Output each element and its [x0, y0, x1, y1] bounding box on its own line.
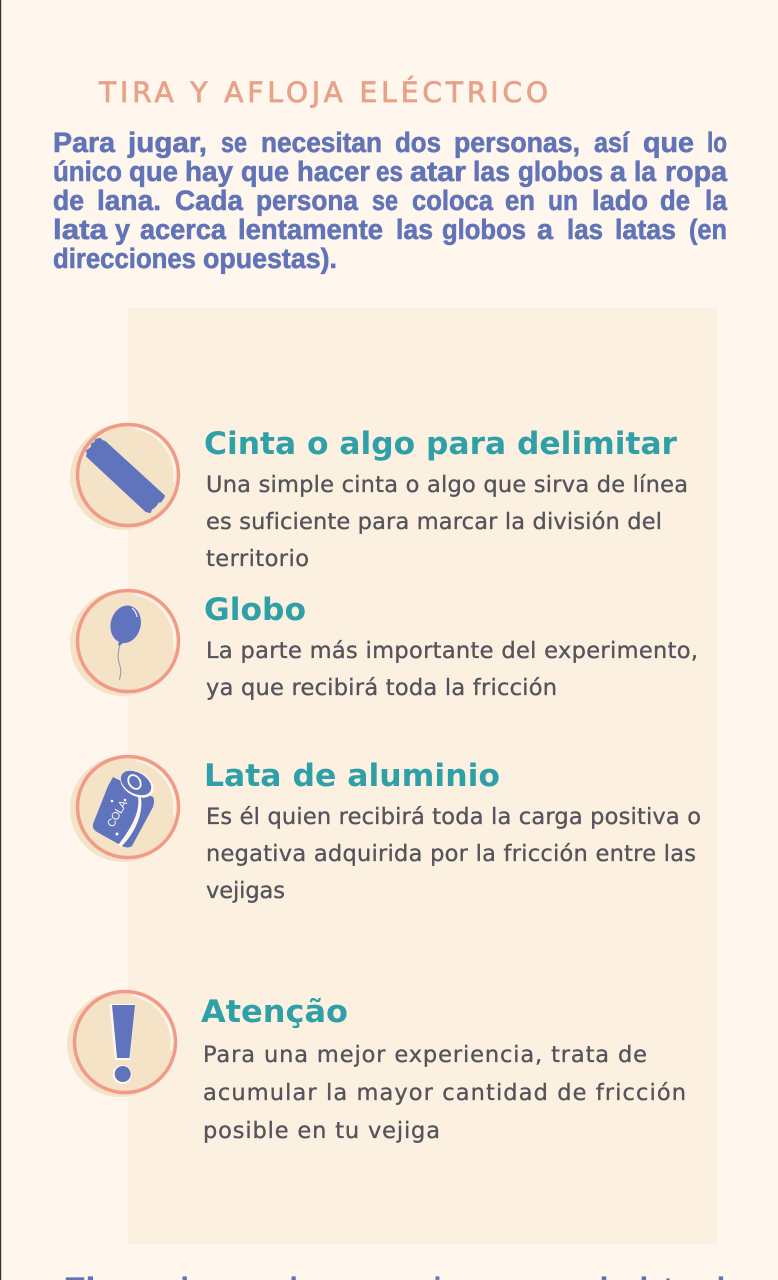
text block: atencao: [203, 1042, 686, 1144]
intro paragraph: atar: [410, 156, 466, 187]
intro paragraph: lado: [592, 185, 648, 216]
intro paragraph: de: [660, 185, 690, 216]
panel: materials background: [128, 308, 718, 1244]
intro paragraph: hay: [185, 156, 233, 187]
text block: atencao: acumular la mayor cantidad de fricción: [203, 1080, 686, 1106]
intro paragraph: a: [537, 214, 553, 245]
heading: globo: Globo: [204, 592, 306, 628]
heading: lata: Lata de aluminio: [204, 758, 500, 794]
intro paragraph: las: [473, 156, 510, 187]
intro paragraph: dos: [395, 127, 441, 158]
intro paragraph: globos: [442, 214, 526, 245]
intro paragraph: y: [115, 214, 130, 245]
intro paragraph: a: [610, 156, 626, 187]
text block: globo: [206, 638, 698, 701]
heading: atencao: Atenção: [201, 994, 348, 1030]
intro paragraph: es: [376, 156, 403, 187]
intro paragraph: globos: [518, 156, 603, 187]
intro paragraph: de: [53, 185, 84, 216]
text block: globo: ya que recibirá toda la fricción: [206, 675, 557, 701]
intro paragraph: la: [705, 185, 727, 216]
intro paragraph: un: [548, 185, 578, 216]
text block: lata: vejigas: [206, 878, 285, 904]
intro paragraph: coloca: [412, 185, 493, 216]
icon: cola can: [70, 756, 178, 862]
intro paragraph: Para: [53, 127, 115, 158]
intro paragraph: persona: [256, 185, 358, 216]
text block: atencao: posible en tu vejiga: [203, 1118, 440, 1144]
intro paragraph: que: [643, 127, 694, 158]
icon: balloon: [70, 590, 178, 696]
intro paragraph: único: [53, 156, 122, 187]
text block: atencao: Para una mejor experiencia, trata de: [203, 1042, 647, 1068]
intro paragraph: acerca: [140, 214, 226, 245]
intro paragraph: direcciones: [53, 243, 196, 274]
text block: cinta: [206, 472, 688, 572]
text block: cinta: es suficiente para marcar la división del: [206, 509, 662, 535]
text block: globo: La parte más importante del experimento,: [206, 638, 698, 664]
icon: tape: [70, 424, 178, 530]
intro paragraph: [53, 127, 727, 274]
intro paragraph: opuestas).: [203, 243, 337, 274]
text block: lata: Es él quien recibirá toda la carga positiva o: [206, 804, 701, 830]
intro paragraph: las: [567, 214, 603, 245]
intro paragraph: hacer: [297, 156, 370, 187]
icon: cola can: COLA: [105, 798, 130, 830]
text block: lata: [206, 804, 701, 904]
intro paragraph: lana.: [97, 185, 161, 216]
intro paragraph: jugar,: [127, 127, 207, 158]
intro paragraph: latas: [615, 214, 676, 245]
intro paragraph: lata: [53, 214, 107, 245]
intro paragraph: se: [221, 127, 247, 158]
intro paragraph: se: [372, 185, 398, 216]
intro paragraph: que: [241, 156, 289, 187]
intro paragraph: (en: [689, 214, 727, 245]
intro paragraph: Cada: [175, 185, 243, 216]
heading: cinta: Cinta o algo para delimitar: [204, 426, 678, 462]
intro paragraph: así: [594, 127, 630, 158]
intro paragraph: necesitan: [261, 127, 382, 158]
text block: cinta: Una simple cinta o algo que sirva de línea: [206, 472, 688, 498]
intro paragraph: la: [634, 156, 656, 187]
intro paragraph: en: [505, 185, 535, 216]
intro paragraph: ropa: [665, 156, 727, 187]
icon: exclamation mark: [67, 991, 176, 1097]
intro paragraph: lentamente: [238, 214, 383, 245]
text block: lata: negativa adquirida por la fricción entre las: [206, 841, 696, 867]
text block: cinta: territorio: [206, 546, 309, 572]
intro paragraph: que: [129, 156, 178, 187]
intro paragraph: personas,: [454, 127, 580, 158]
intro paragraph: las: [396, 214, 433, 245]
intro paragraph: lo: [707, 127, 727, 158]
title: TIRA Y AFLOJA ELÉCTRICO: [98, 76, 548, 109]
